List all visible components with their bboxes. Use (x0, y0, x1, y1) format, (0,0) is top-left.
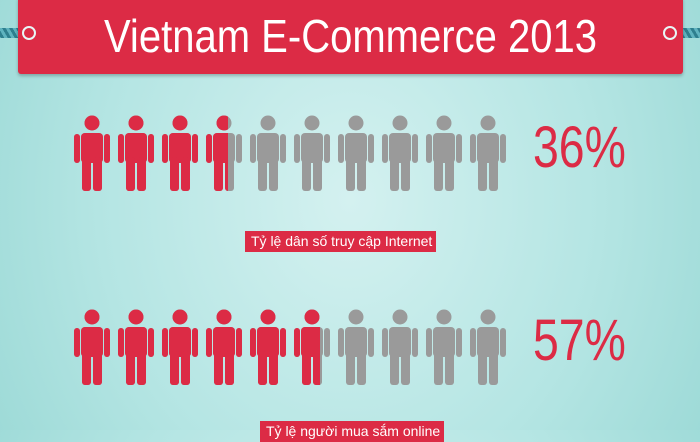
rope left (0, 28, 30, 38)
people row 2 (57%) (74, 310, 506, 385)
rope right (668, 28, 700, 38)
title banner (18, 0, 683, 74)
ring left (22, 26, 36, 40)
people row 1 (36%) (74, 116, 506, 191)
ring right (663, 26, 677, 40)
percentage 57%: 57% (533, 308, 626, 373)
title banner: Vietnam E-Commerce 2013 (104, 10, 597, 62)
label: internet access: Tỷ lệ dân số truy cập Internet (251, 233, 432, 249)
label 2 (cut off): Tỷ lệ người mua sắm online (266, 423, 440, 439)
percentage 36%: 36% (533, 115, 626, 180)
